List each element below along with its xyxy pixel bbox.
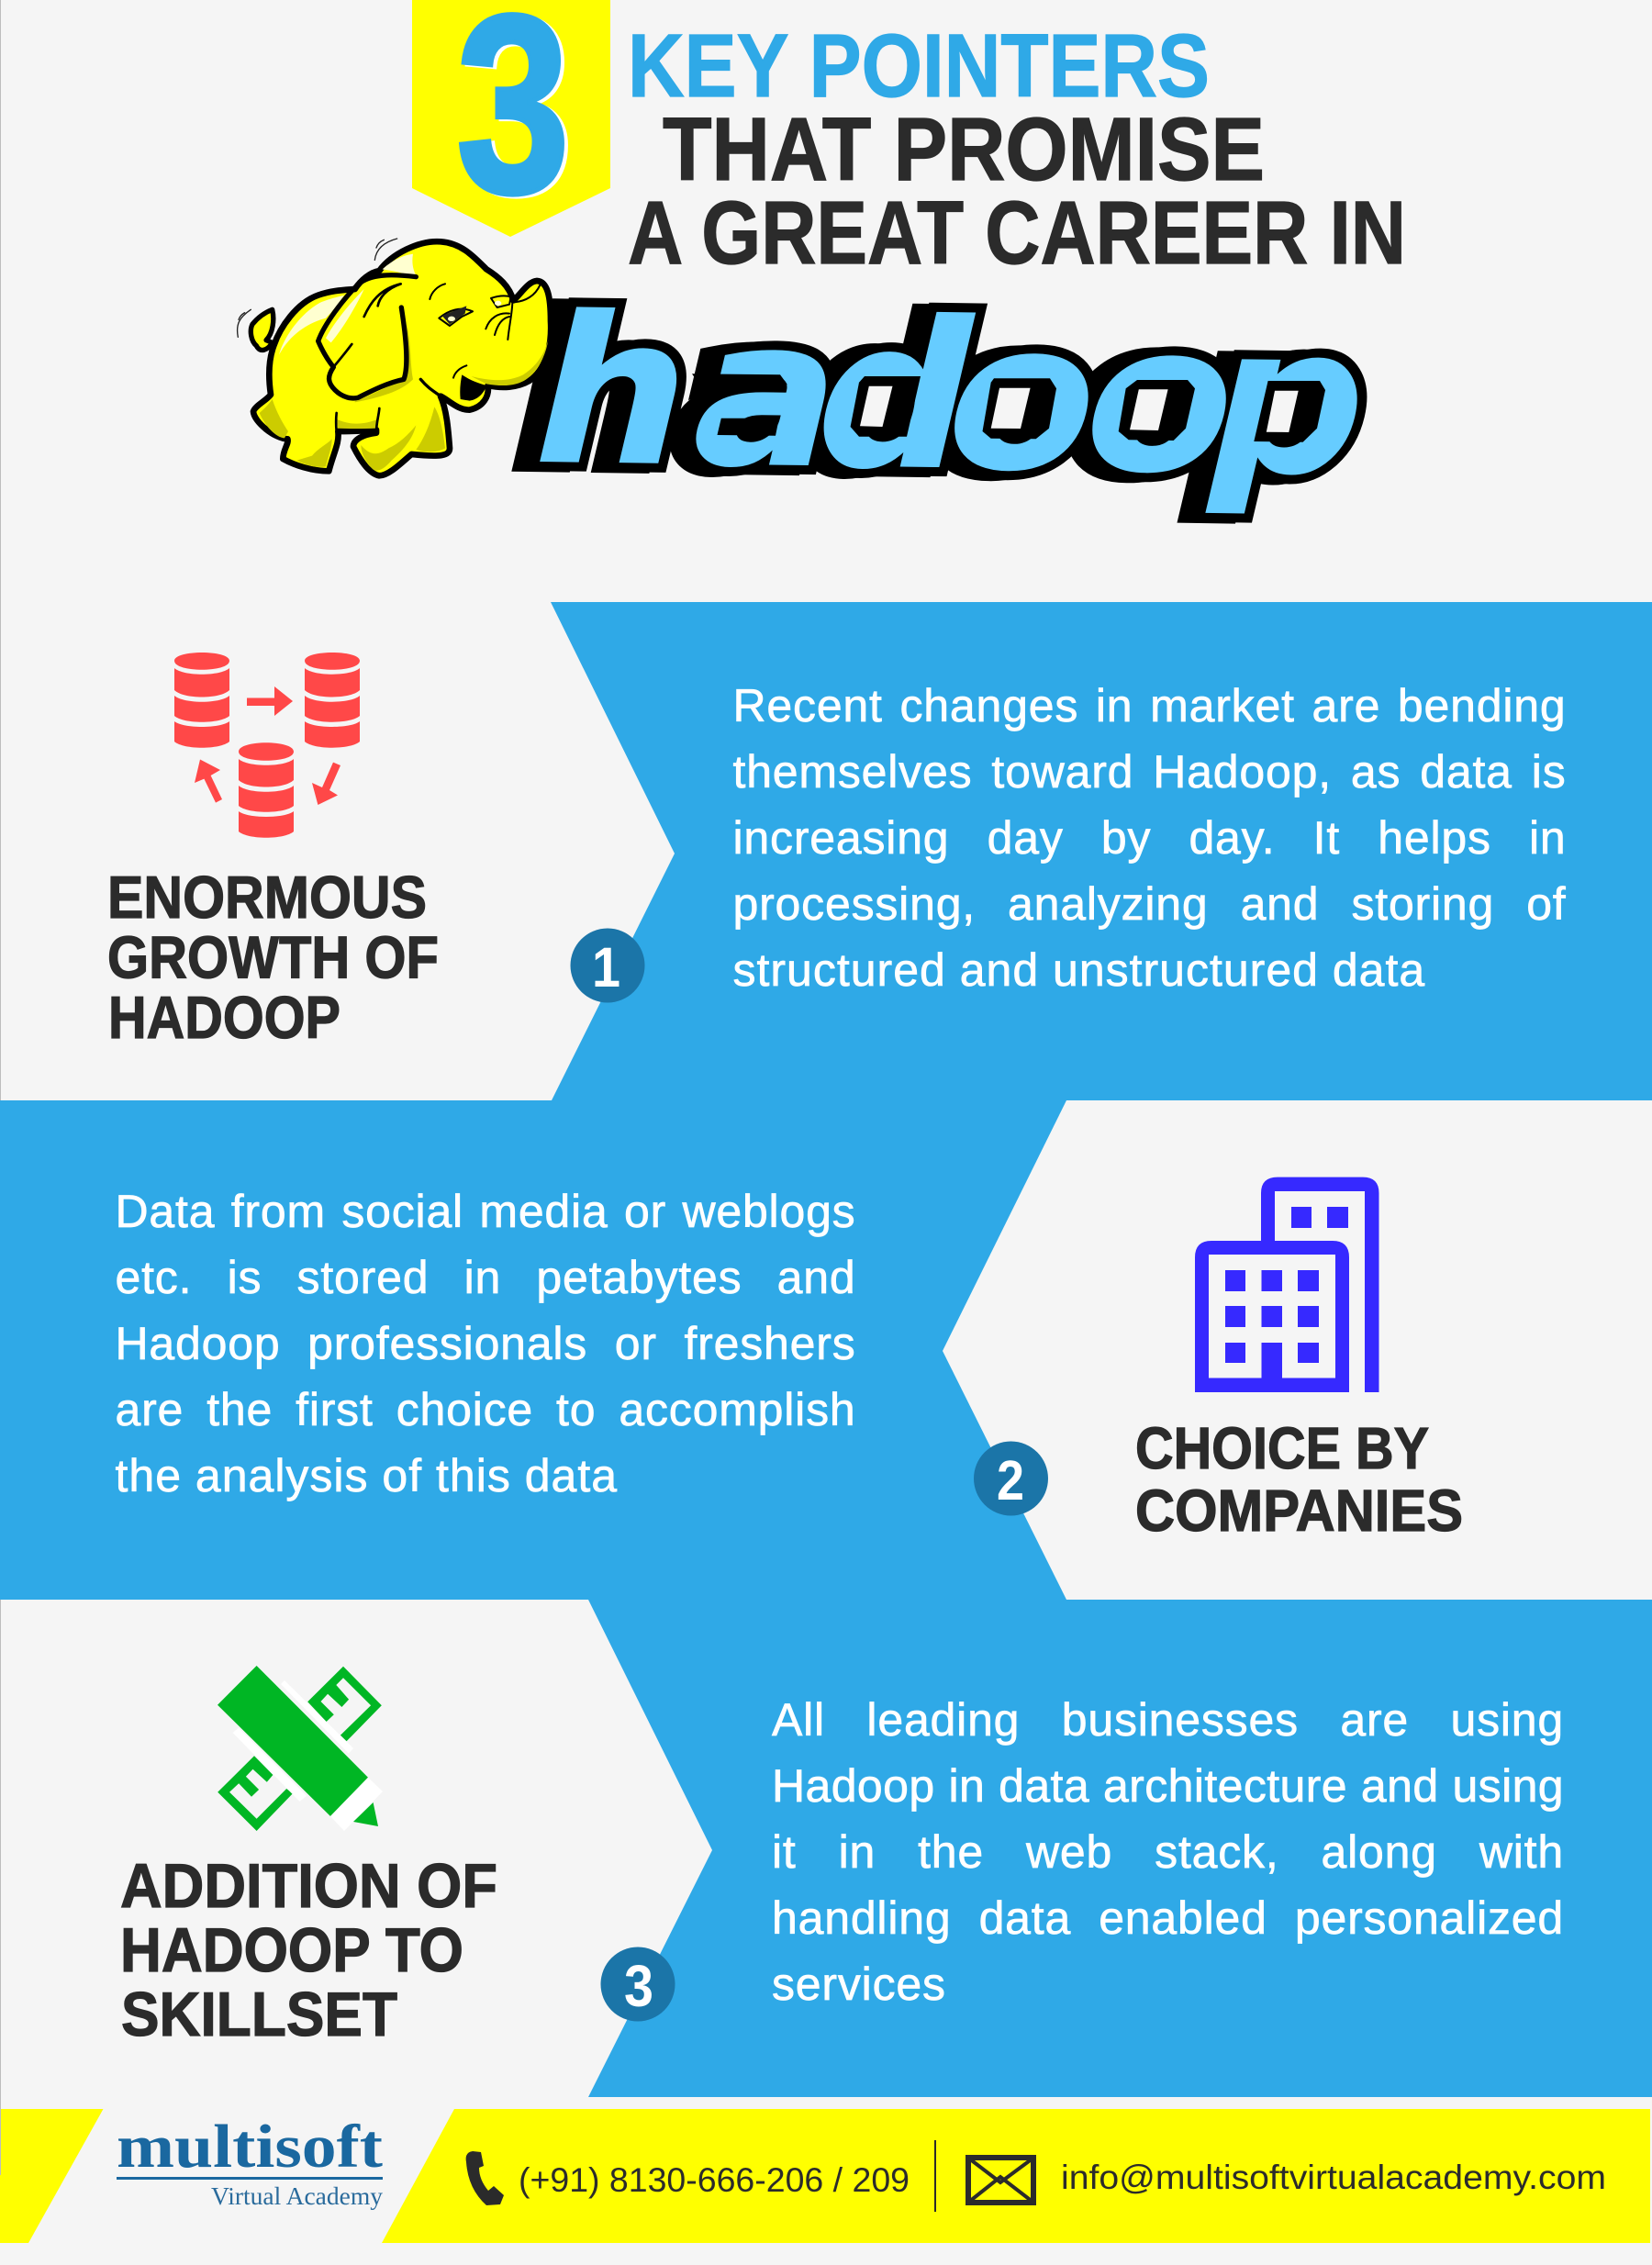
text block: panel 2 description: are the first choice to accomplish <box>116 1384 855 1435</box>
logo: multisoft Virtual Academy: multisoft <box>117 2113 384 2181</box>
Hadoop wordmark: hadoop <box>496 274 1379 520</box>
title: A GREAT CAREER IN <box>628 183 1406 283</box>
icon: three databases with arrows <box>174 653 360 838</box>
text block: panel 1 description <box>732 679 1566 995</box>
text block: panel 2 description: Hadoop professionals or freshers <box>116 1318 855 1369</box>
icon: phone <box>466 2151 504 2205</box>
number badge 2: 2 <box>997 1449 1024 1512</box>
heading <box>120 1851 497 2049</box>
footer: logo and contact bar <box>0 2109 1650 2243</box>
blue arrow panel <box>551 602 1652 1100</box>
email address: info@multisoftvirtualacademy.com <box>1061 2159 1606 2196</box>
title: THAT PROMISE <box>663 99 1265 199</box>
number badge 3: 3 <box>624 1953 653 2019</box>
text block: panel 2 description: Data from social media or weblogs <box>116 1186 855 1237</box>
header: title and Hadoop logo <box>237 0 1406 524</box>
text block: panel 3 description <box>771 1694 1564 2010</box>
text block: panel 3 description: handling data enabled personalized <box>772 1892 1564 1944</box>
text block: panel 3 description: it in the web stack, along with <box>772 1826 1564 1878</box>
heading: HADOOP <box>108 984 340 1051</box>
text block: panel 1 description: processing, analyzing and storing of <box>732 877 1566 929</box>
icon: crossed pencil and ruler <box>218 1666 383 1831</box>
panel: choice by companies <box>0 1100 1652 1600</box>
icon: Hadoop elephant <box>238 239 551 475</box>
yellow bars <box>0 2109 1650 2243</box>
heading: SKILLSET <box>121 1980 397 2049</box>
phone number: (+91) 8130-666-206 / 209 <box>519 2161 910 2199</box>
number badge 3 <box>600 1947 675 2021</box>
text block: panel 2 description: the analysis of this data <box>116 1450 618 1501</box>
Hadoop wordmark: hadoop <box>512 273 1395 519</box>
heading: GROWTH OF <box>107 923 439 991</box>
text block: panel 1 description: themselves toward Hadoop, as data is <box>732 745 1566 797</box>
heading: ADDITION OF <box>120 1851 497 1921</box>
number badge 2 <box>974 1441 1048 1516</box>
text block: panel 2 description: etc. is stored in petabytes and <box>116 1252 855 1303</box>
icon: envelope <box>968 2158 1033 2203</box>
light arrow notch <box>943 1100 1652 1600</box>
heading <box>1135 1415 1463 1544</box>
icon: office buildings <box>1195 1177 1379 1392</box>
heading <box>107 864 439 1051</box>
text block: panel 3 description: Hadoop in data architecture and using <box>772 1760 1564 1812</box>
logo: multisoft Virtual Academy: Virtual Academy <box>211 2182 383 2210</box>
heading: CHOICE BY <box>1135 1415 1429 1481</box>
heading: ENORMOUS <box>107 864 427 931</box>
Hadoop wordmark: hadoop <box>512 273 1395 519</box>
panel: addition of Hadoop to skillset <box>120 1600 1652 2097</box>
heading: COMPANIES <box>1135 1478 1463 1544</box>
text block: panel 1 description: structured and unstructured data <box>732 943 1425 995</box>
text block: panel 1 description: Recent changes in market are bending <box>732 679 1566 731</box>
text block: panel 3 description: services <box>772 1958 946 2010</box>
blue arrow panel <box>588 1600 1652 2097</box>
panel: enormous growth of Hadoop <box>107 602 1652 1100</box>
title: KEY POINTERS <box>628 16 1210 116</box>
text block: panel 2 description <box>116 1186 855 1501</box>
number badge 1 <box>571 929 644 1002</box>
title <box>628 16 1406 283</box>
text block: panel 1 description: increasing day by day. It helps in <box>732 811 1566 863</box>
number badge 1: 1 <box>592 936 620 999</box>
logo: multisoft Virtual Academy <box>117 2113 384 2210</box>
heading: HADOOP TO <box>120 1915 463 1985</box>
text block: panel 3 description: All leading businesses are using <box>772 1694 1564 1746</box>
